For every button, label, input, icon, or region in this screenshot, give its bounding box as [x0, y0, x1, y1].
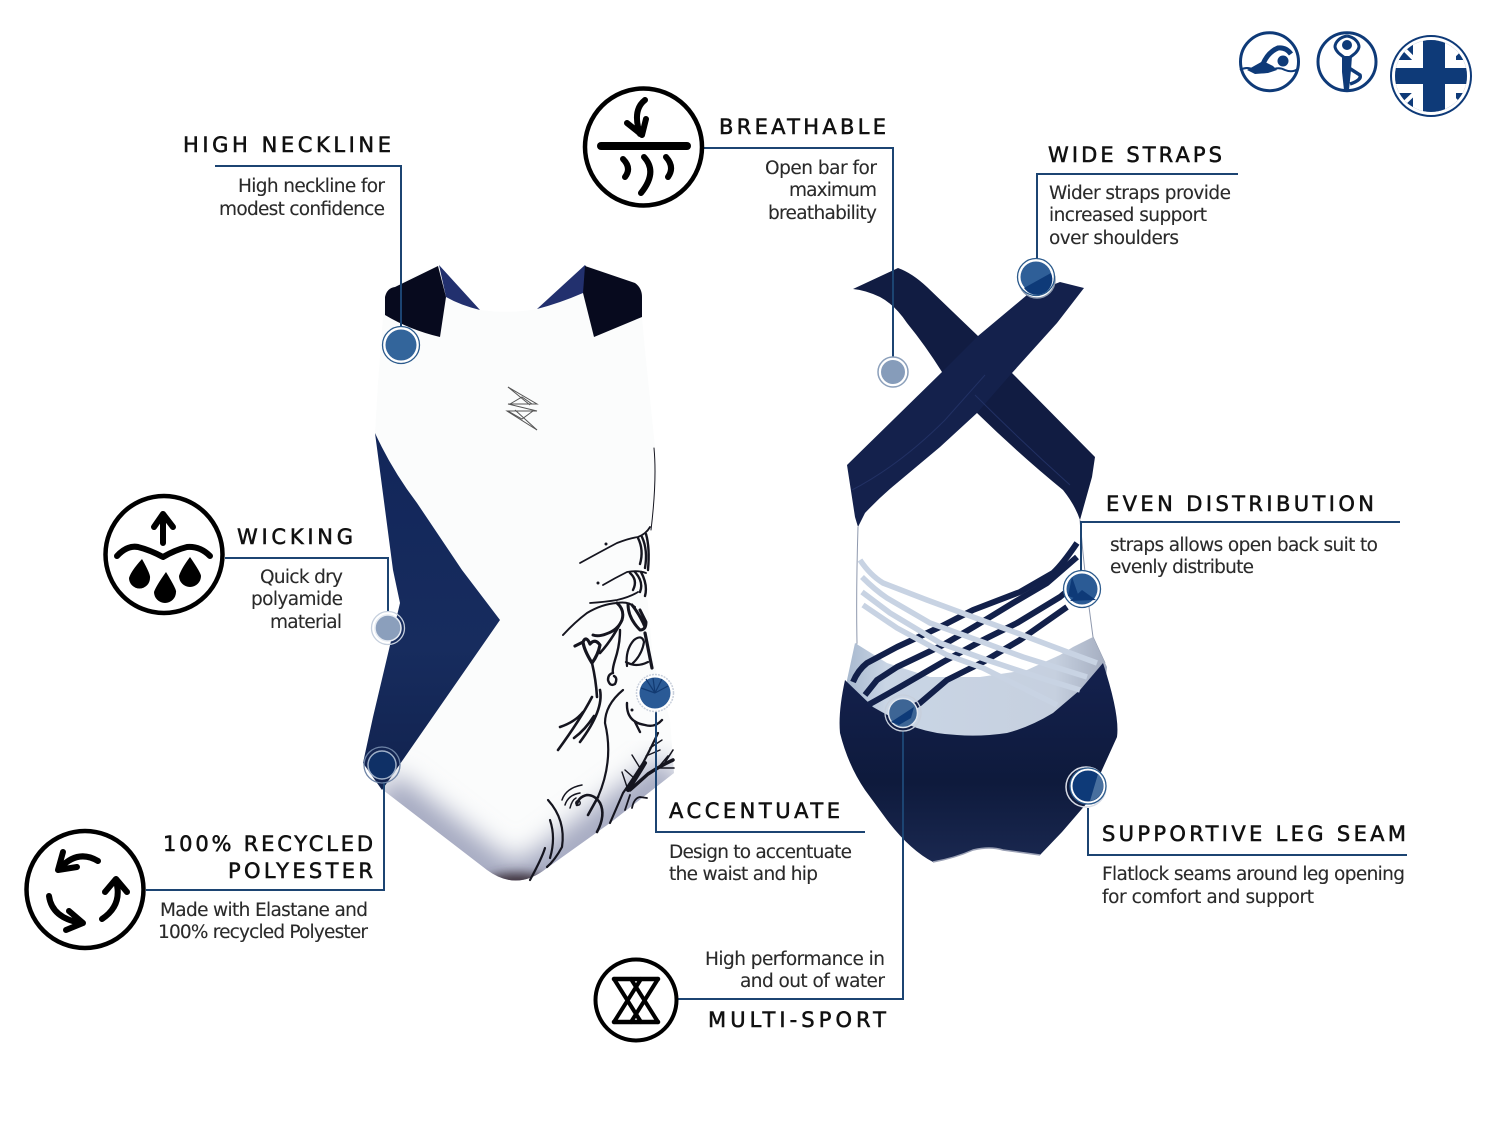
- heading: [163, 832, 373, 883]
- description: Made with Elastane and: [160, 900, 368, 921]
- feature: even distribution: [1064, 492, 1400, 608]
- description: modest confidence: [219, 199, 385, 220]
- description: increased support: [1049, 205, 1207, 226]
- front suit white body: [363, 265, 674, 881]
- description: straps allows open back suit to: [1110, 535, 1378, 556]
- leader line: [225, 558, 388, 612]
- feature: breathable: [585, 88, 908, 387]
- icon: recycle: [26, 831, 144, 948]
- description: Quick dry: [260, 567, 343, 588]
- description: High performance in: [705, 949, 885, 970]
- description: and out of water: [740, 971, 885, 992]
- description: [669, 842, 852, 885]
- feature: accentuate: [636, 674, 865, 885]
- leader line: [656, 712, 865, 832]
- icon: multi-sport: [596, 960, 676, 1040]
- description: [251, 567, 343, 633]
- marker: [1064, 570, 1100, 608]
- right shoulder panel: [537, 265, 590, 309]
- marker: [1066, 767, 1106, 807]
- front suit leg edge shading: [383, 773, 674, 899]
- leader line: [1088, 808, 1407, 855]
- back left strap: [853, 268, 1095, 520]
- description: for comfort and support: [1102, 887, 1314, 908]
- back suit lining: [847, 637, 1107, 745]
- leader line: [215, 166, 401, 326]
- back suit lower body: [840, 663, 1117, 862]
- icon: breathable: [585, 88, 702, 206]
- marker: [636, 674, 674, 712]
- icon: wicking: [106, 496, 222, 613]
- description: High neckline for: [238, 176, 385, 197]
- description: [158, 900, 368, 943]
- description: Flatlock seams around leg opening: [1102, 864, 1405, 885]
- description: 100% recycled Polyester: [158, 922, 368, 943]
- marker: [885, 695, 921, 731]
- navy back straps: [853, 543, 1077, 713]
- floral artwork: [530, 448, 674, 880]
- marker: [878, 357, 908, 387]
- marker: [1018, 258, 1055, 298]
- feature: wicking: [106, 496, 404, 644]
- back swimsuit: [840, 268, 1117, 862]
- light back straps: [860, 560, 1097, 705]
- leader line: [1037, 174, 1238, 259]
- back suit side edges: [848, 520, 1105, 683]
- back right strap: [847, 282, 1084, 527]
- heading: HIGH NECKLINE: [183, 133, 391, 157]
- marker: [364, 747, 400, 783]
- description: Open bar for: [765, 158, 877, 179]
- description: over shoulders: [1049, 228, 1179, 249]
- heading: WIDE STRAPS: [1048, 143, 1222, 167]
- heading: WICKING: [237, 525, 353, 549]
- chest logo: [507, 387, 537, 430]
- heading: BREATHABLE: [719, 115, 886, 139]
- heading: 100% RECYCLED: [163, 832, 373, 856]
- description: [705, 949, 885, 992]
- front suit navy side panel: [363, 433, 500, 790]
- heading: ACCENTUATE: [669, 799, 840, 823]
- icon: yoga: [1318, 33, 1376, 91]
- feature: wide straps: [1018, 143, 1238, 298]
- icon: swimming: [1240, 33, 1298, 91]
- description: the waist and hip: [669, 864, 818, 885]
- marker: [372, 612, 404, 644]
- description: evenly distribute: [1110, 557, 1254, 578]
- heading: SUPPORTIVE LEG SEAM: [1102, 822, 1406, 846]
- leader line: [678, 731, 903, 999]
- icon: union flag badge: [1390, 35, 1472, 117]
- heading: EVEN DISTRIBUTION: [1106, 492, 1374, 516]
- heading: MULTI-SPORT: [708, 1008, 886, 1032]
- leader line: [704, 148, 893, 358]
- description: Wider straps provide: [1049, 183, 1231, 204]
- leader line: [146, 782, 384, 890]
- feature: recycled polyester: [26, 747, 400, 948]
- description: [219, 176, 385, 220]
- feature: high neckline: [183, 133, 420, 364]
- description: [1110, 535, 1378, 578]
- description: [765, 158, 877, 224]
- feature: supportive leg seam: [1066, 767, 1407, 908]
- left shoulder panel: [439, 265, 480, 310]
- leader line: [1081, 522, 1400, 572]
- marker: [382, 326, 420, 364]
- description: material: [270, 612, 342, 633]
- description: polyamide: [251, 589, 343, 610]
- description: breathability: [768, 203, 877, 224]
- description: Design to accentuate: [669, 842, 852, 863]
- front swimsuit: [363, 265, 674, 899]
- description: [1102, 864, 1405, 908]
- description: [1049, 183, 1231, 249]
- description: maximum: [789, 180, 877, 201]
- heading: POLYESTER: [228, 859, 373, 883]
- feature: multi-sport: [596, 695, 921, 1040]
